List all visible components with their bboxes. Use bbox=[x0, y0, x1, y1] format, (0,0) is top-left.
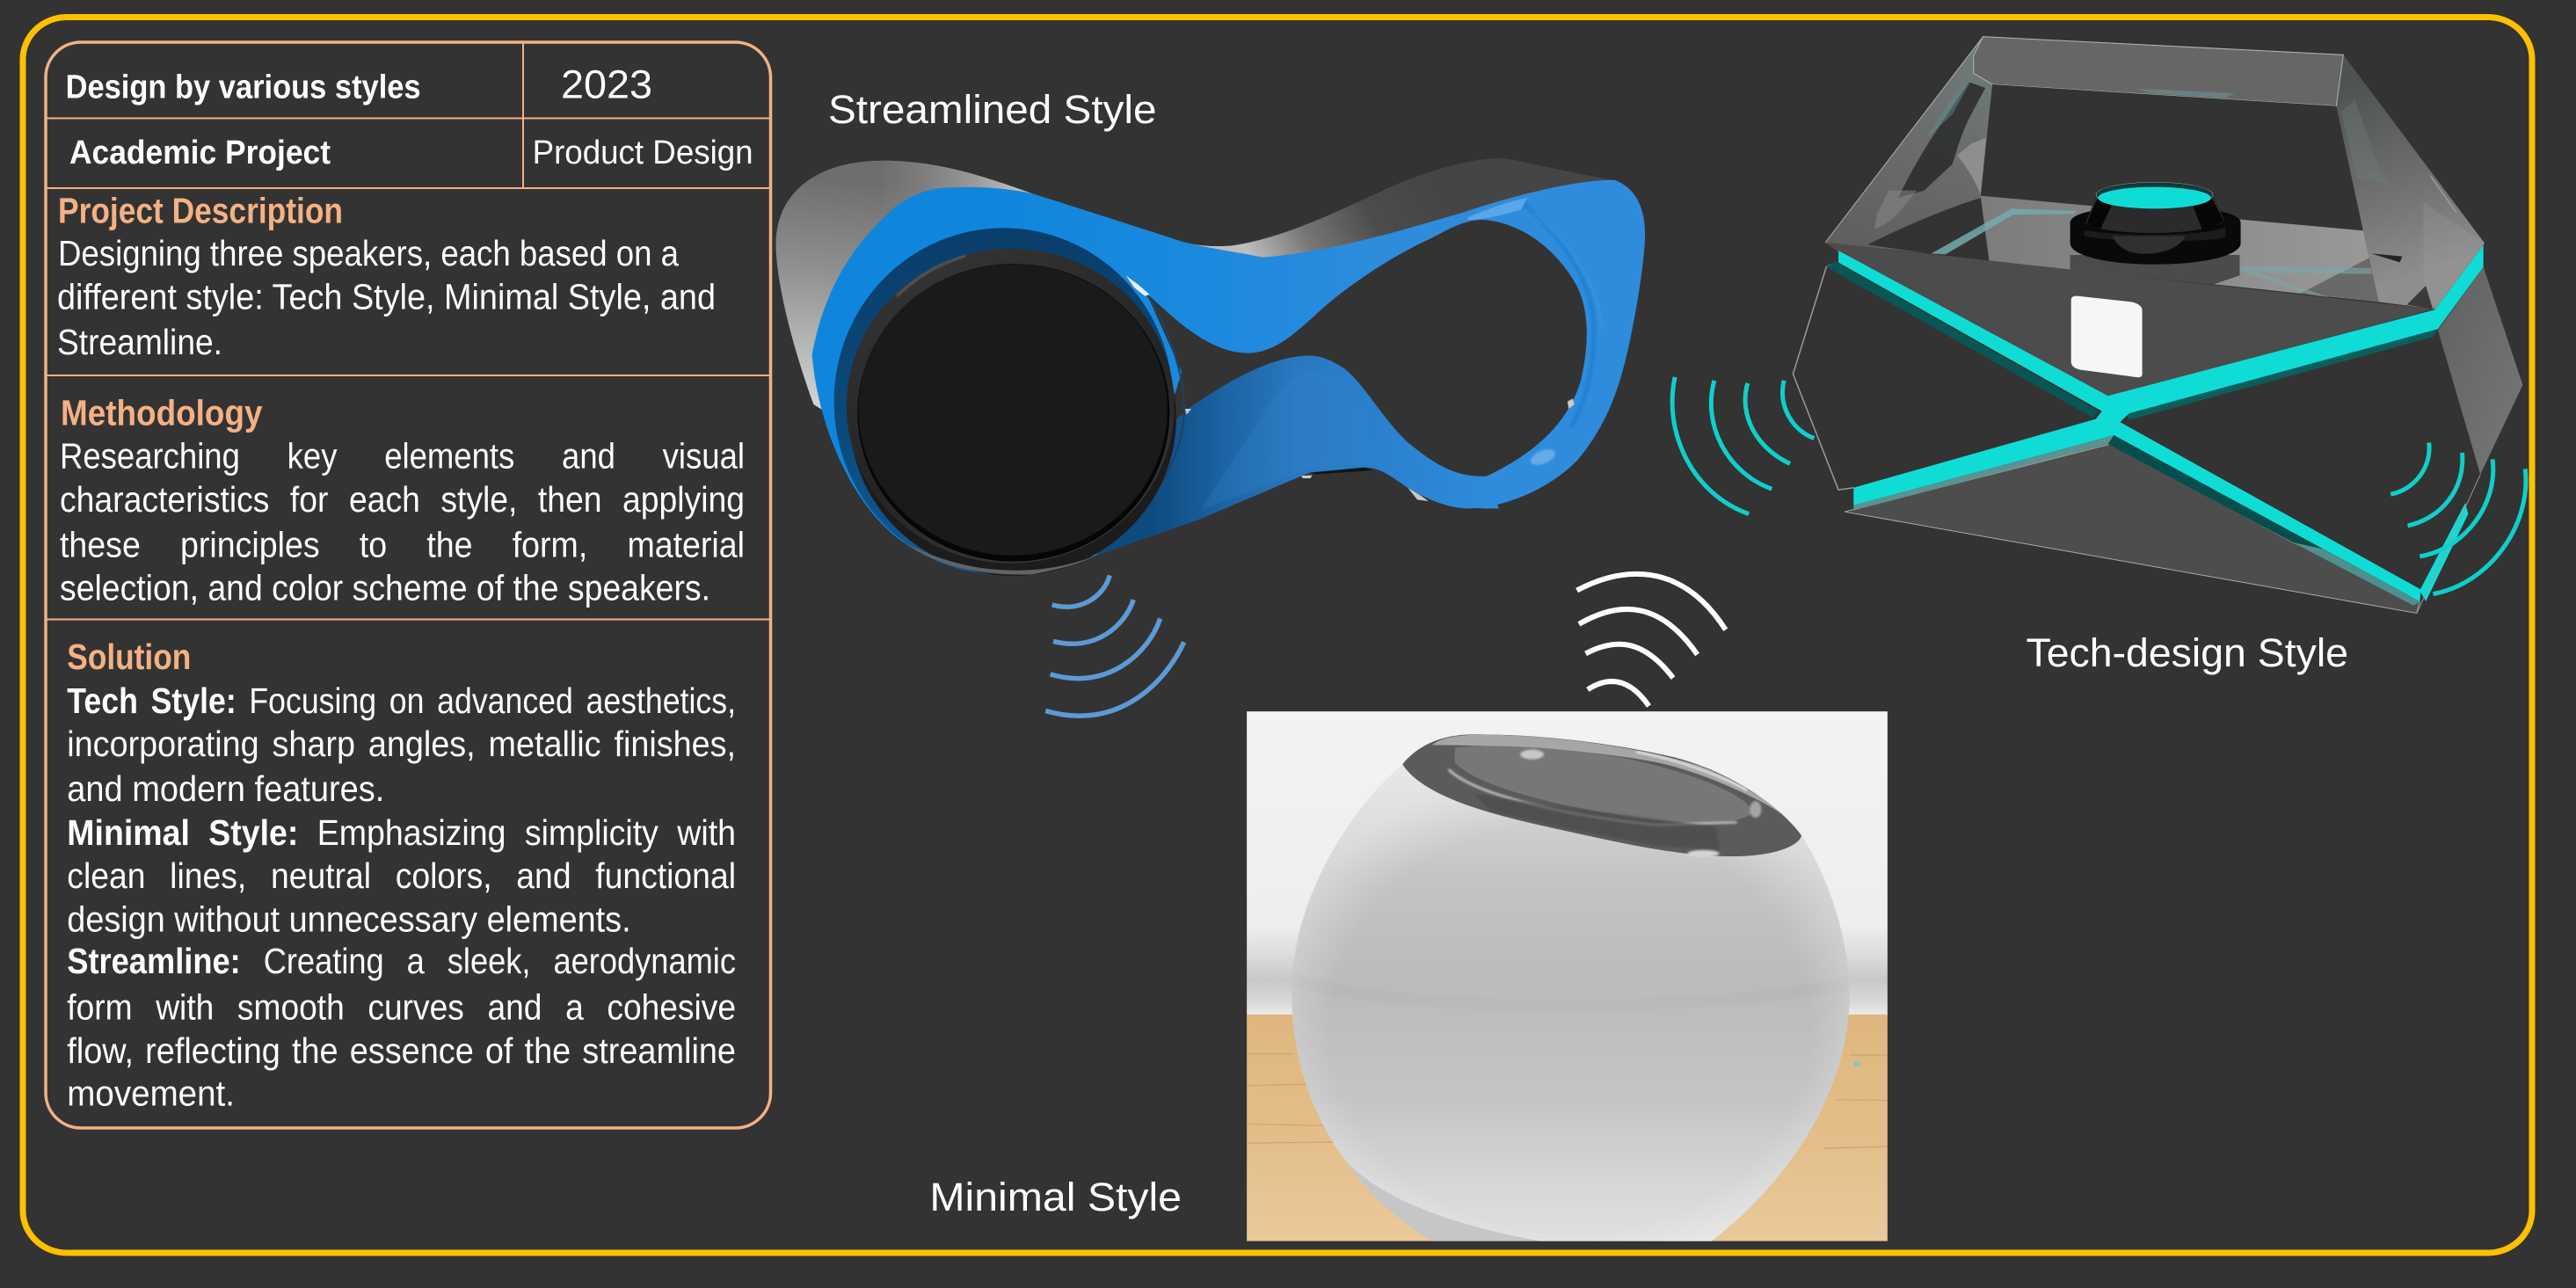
grey back band right bbox=[1169, 158, 1615, 273]
speaker bezel bbox=[847, 249, 1175, 564]
section: methodology: characteristics for each style, then applying bbox=[60, 479, 745, 520]
knob bbox=[2070, 182, 2241, 284]
section: methodology: selection, and color scheme of the speakers. bbox=[60, 568, 710, 608]
knob base bbox=[2070, 207, 2241, 265]
right glass pillar bbox=[2336, 55, 2485, 309]
knob shadow bbox=[2070, 255, 2239, 284]
heading: design by various styles: Design by various styles bbox=[66, 69, 421, 106]
speaker: tech design bbox=[1793, 37, 2522, 613]
section: solution: design without unnecessary elements. bbox=[67, 899, 631, 939]
sound waves: blue bbox=[1045, 575, 1184, 716]
label: tech-design style: Tech-design Style bbox=[2026, 630, 2348, 675]
discipline: Product Design bbox=[533, 135, 753, 171]
top face bbox=[1825, 243, 2434, 397]
specular sliver bbox=[1126, 275, 1149, 296]
speaker cone bbox=[858, 264, 1168, 556]
egg base band bbox=[1344, 1159, 1741, 1241]
section: solution bbox=[67, 637, 736, 1113]
section: project description: Designing three speakers, each based on a bbox=[58, 233, 679, 273]
cone shadow bbox=[857, 264, 1169, 562]
section: project description: Streamline. bbox=[57, 322, 222, 362]
blue shell bbox=[812, 180, 1645, 574]
bezel highlight bbox=[897, 256, 966, 296]
heading: project description: Project Description bbox=[58, 190, 343, 230]
section: solution: Streamline: Creating a sleek, aerodynamic bbox=[67, 941, 736, 981]
section: solution: Minimal Style: Emphasizing simplicity with bbox=[67, 812, 736, 853]
opening inner bowl bbox=[1455, 746, 1752, 823]
rear lower shell bbox=[849, 259, 1176, 576]
thin rear edge bbox=[1146, 293, 1184, 490]
panel: project information bbox=[46, 42, 770, 1128]
lower body bbox=[1826, 245, 2484, 613]
rear faces bbox=[1793, 263, 2522, 490]
year: 2023 bbox=[561, 62, 652, 107]
section: project description: different style: Tech Style, Minimal Style, and bbox=[57, 276, 716, 317]
lower lobe sheen bbox=[1201, 370, 1371, 510]
project type: Academic Project bbox=[69, 135, 331, 171]
section: methodology bbox=[60, 392, 745, 608]
floor plank lines bbox=[1247, 1054, 1888, 1148]
cyan light band bbox=[1838, 245, 2484, 601]
band shadows bbox=[1826, 262, 2099, 418]
heading: solution: Solution bbox=[67, 637, 191, 677]
left glass pillar bbox=[1825, 37, 1992, 261]
handle top bar bbox=[1974, 37, 2343, 106]
bottom face bbox=[1845, 444, 2420, 613]
label: minimal style: Minimal Style bbox=[929, 1175, 1182, 1219]
specular glows bbox=[1520, 750, 1544, 760]
thin cyan edge bbox=[2420, 503, 2468, 601]
label: streamlined style: Streamlined Style bbox=[828, 87, 1157, 132]
dust speck bbox=[1853, 1060, 1860, 1067]
section: solution: movement. bbox=[67, 1073, 235, 1113]
inner lip highlight bbox=[1449, 769, 1736, 825]
section: solution: incorporating sharp angles, metallic finishes, bbox=[67, 724, 736, 764]
photo: minimal speaker bbox=[1247, 711, 1888, 1241]
wall bbox=[1247, 711, 1888, 1017]
sound waves: white bbox=[1577, 574, 1726, 706]
inner tray bbox=[1981, 196, 2379, 302]
section: methodology: these principles to the form, material bbox=[60, 524, 745, 564]
speaker: streamlined blue bbox=[775, 158, 1645, 576]
rim highlights bbox=[1467, 198, 1527, 220]
right side face bbox=[2438, 267, 2522, 475]
right edge tick bbox=[2430, 176, 2456, 213]
section: solution: clean lines, neutral colors, and functional bbox=[67, 855, 736, 896]
knob cap bbox=[2085, 193, 2224, 233]
window opening bbox=[1981, 84, 2363, 230]
section: solution: and modern features. bbox=[67, 768, 384, 809]
section: solution: Tech Style: Focusing on advanced aesthetics, bbox=[67, 680, 736, 721]
grey back shell left bbox=[775, 161, 1047, 413]
section: solution: flow, reflecting the essence of the streamline bbox=[67, 1030, 736, 1071]
left edge line bbox=[1825, 37, 1983, 243]
lower left outline face bbox=[1793, 263, 1853, 490]
dark ring shadow bbox=[834, 228, 1173, 575]
egg edge glow bbox=[1292, 765, 1850, 1143]
section: solution: form with smooth curves and a cohesive bbox=[67, 986, 736, 1027]
egg opening bbox=[1402, 734, 1801, 856]
equator seam bbox=[1292, 972, 1849, 1011]
heading: methodology: Methodology bbox=[61, 392, 263, 433]
display panel bbox=[2071, 296, 2143, 377]
sound waves: cyan bbox=[1672, 377, 2526, 594]
egg body bbox=[1292, 764, 1850, 1241]
rough edge specks bbox=[1185, 398, 1575, 501]
section: project description bbox=[57, 190, 716, 362]
section: methodology: Researching key elements and visual bbox=[60, 436, 745, 477]
opening between loops bbox=[1146, 220, 1587, 477]
glass frame and knob bbox=[1825, 37, 2485, 397]
knob light bbox=[2098, 187, 2211, 208]
opening top rim bbox=[1432, 735, 1783, 815]
floor bbox=[1247, 1015, 1888, 1241]
reflected light strips bbox=[1932, 208, 2078, 254]
right loop crease bbox=[1524, 204, 1594, 428]
panel outline bbox=[46, 42, 770, 1128]
lower blue lobe bbox=[1096, 355, 1499, 556]
